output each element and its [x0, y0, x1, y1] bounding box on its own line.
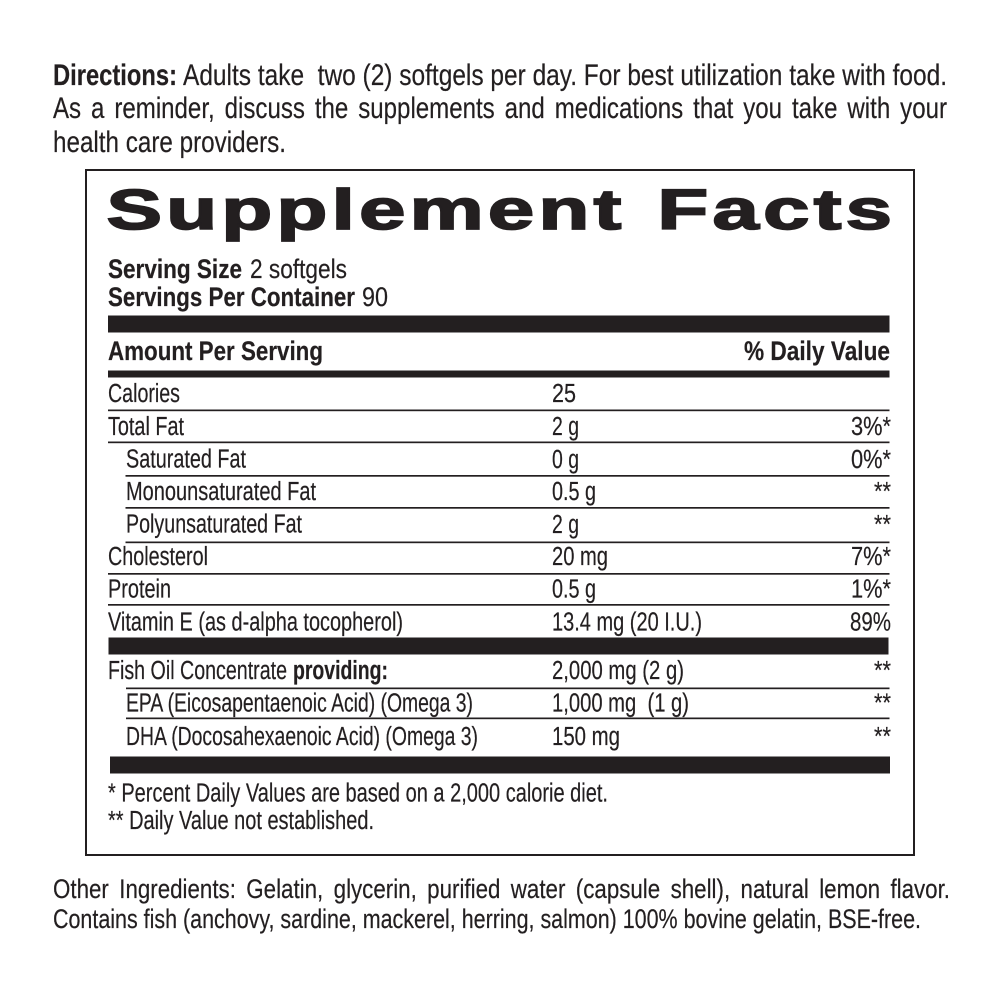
table header	[108, 316, 890, 378]
table header: % Daily Value	[744, 336, 890, 366]
nutrient rows: Cholesterol	[108, 543, 208, 571]
serving information	[108, 254, 388, 312]
other ingredients text block	[53, 874, 950, 934]
fish oil rows: 2,000 mg (2 g)	[552, 657, 684, 685]
nutrient rows: Total Fat	[108, 413, 184, 441]
footnotes: ** Daily Value not established.	[108, 807, 374, 835]
nutrient rows: 2 g	[552, 511, 579, 539]
nutrient rows: 13.4 mg (20 I.U.)	[552, 608, 702, 636]
nutrient rows: 3%*	[851, 413, 891, 441]
nutrient rows: 25	[552, 380, 576, 408]
table header: Amount Per Serving	[108, 336, 323, 366]
fish oil rows: Fish Oil Concentrate	[108, 657, 287, 685]
nutrient rows: **	[874, 511, 891, 539]
nutrient rows: 0.5 g	[552, 576, 596, 604]
nutrient rows: 7%*	[851, 543, 891, 571]
fish oil rows: **	[874, 723, 891, 751]
fish oil rows: 1,000 mg (1 g)	[552, 690, 689, 718]
footnotes: * Percent Daily Values are based on a 2,000 calorie diet.	[108, 780, 608, 808]
nutrient rows: 0 g	[552, 446, 579, 474]
fish oil rows: **	[874, 690, 891, 718]
nutrient rows	[108, 380, 891, 636]
divider bar	[110, 756, 890, 774]
fish oil rows: **	[874, 657, 891, 685]
nutrient rows: Vitamin E (as d-alpha tocopherol)	[108, 608, 403, 636]
directions text block: Directions:	[53, 59, 177, 92]
nutrient rows: **	[874, 478, 891, 506]
serving information: Serving Size	[108, 254, 242, 284]
nutrient rows: 0%*	[851, 446, 891, 474]
nutrient rows: Protein	[108, 576, 171, 604]
nutrient rows: Monounsaturated Fat	[126, 478, 316, 506]
divider bar	[108, 638, 888, 654]
nutrient rows: Polyunsaturated Fat	[126, 510, 302, 538]
fish oil rows: 150 mg	[552, 723, 620, 751]
fish oil rows: providing:	[293, 657, 388, 685]
nutrient rows: 1%*	[851, 576, 891, 604]
serving information: 90	[362, 282, 388, 312]
heading: supplement facts: Supplement Facts	[106, 178, 892, 242]
panel: supplement facts	[86, 170, 914, 855]
directions text block	[53, 59, 947, 159]
fish oil rows	[108, 657, 891, 751]
nutrient rows: Saturated Fat	[126, 446, 246, 474]
footnotes	[108, 780, 608, 835]
nutrient rows: 20 mg	[552, 543, 608, 571]
nutrient rows: 89%	[850, 608, 891, 636]
nutrient rows: 0.5 g	[552, 478, 596, 506]
fish oil rows: EPA (Eicosapentaenoic Acid) (Omega 3)	[126, 690, 473, 718]
nutrient rows: 2 g	[552, 413, 579, 441]
serving information: Servings Per Container	[108, 282, 355, 312]
nutrient rows: Calories	[108, 380, 180, 408]
directions text block: health care providers.	[53, 126, 286, 159]
fish oil rows: DHA (Docosahexaenoic Acid) (Omega 3)	[126, 723, 478, 751]
serving information: 2 softgels	[250, 254, 347, 284]
